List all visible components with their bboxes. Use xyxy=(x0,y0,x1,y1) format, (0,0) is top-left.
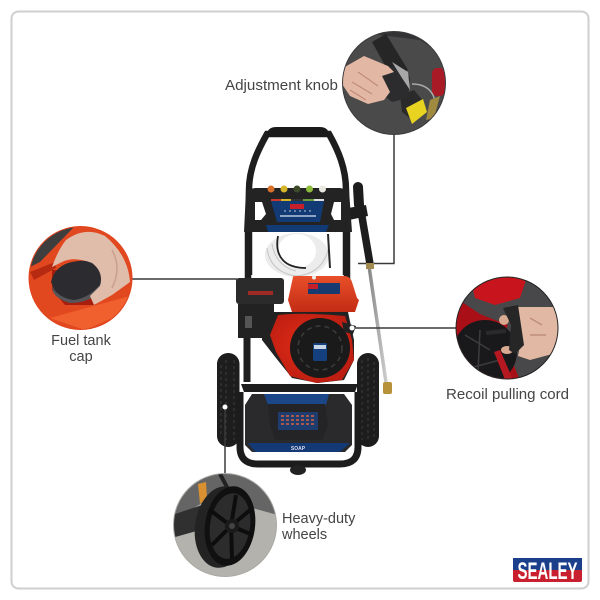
engine block xyxy=(262,312,354,383)
recoil handle xyxy=(342,322,356,334)
label: heavy-duty wheels: wheels xyxy=(281,527,327,543)
air filter box xyxy=(236,278,284,338)
cut-outs in panel xyxy=(255,202,341,220)
connector: fuel tank cap xyxy=(132,278,237,280)
deck xyxy=(241,384,358,392)
photo: recoil pulling cord xyxy=(453,276,560,384)
connector: recoil pulling cord xyxy=(350,326,456,330)
photo: fuel tank cap xyxy=(28,226,133,331)
label: adjustment knob: Adjustment knob xyxy=(225,78,338,94)
nozzles xyxy=(268,186,326,192)
pressure washer xyxy=(217,127,392,475)
blue panel label xyxy=(271,201,324,222)
hose coil xyxy=(265,233,330,277)
lower frame xyxy=(240,392,358,464)
frame legs xyxy=(244,338,250,382)
connector: wheels xyxy=(222,404,228,473)
label: fuel tank cap: Fuel tank xyxy=(51,333,112,349)
connector: adjustment knob xyxy=(358,135,394,264)
soap tank xyxy=(245,394,352,452)
handle grip xyxy=(266,127,330,137)
wand xyxy=(369,266,392,394)
label: heavy-duty wheels: Heavy-duty xyxy=(282,511,356,527)
wheels xyxy=(217,353,379,447)
frame uprights xyxy=(248,232,347,285)
recoil cover xyxy=(290,318,350,378)
spray gun xyxy=(348,187,374,269)
foot xyxy=(290,465,306,475)
photo: adjustment knob xyxy=(342,31,446,135)
label: fuel tank cap: cap xyxy=(69,349,93,365)
soap tank: SOAP xyxy=(291,446,306,452)
accessory panel xyxy=(244,188,352,232)
label: recoil pulling cord: Recoil pulling cord xyxy=(446,387,569,403)
photo: heavy-duty wheels xyxy=(172,472,278,578)
handle frame xyxy=(249,134,346,275)
blue strip xyxy=(266,225,329,232)
fuel tank xyxy=(288,276,359,312)
colour chips xyxy=(271,199,324,201)
